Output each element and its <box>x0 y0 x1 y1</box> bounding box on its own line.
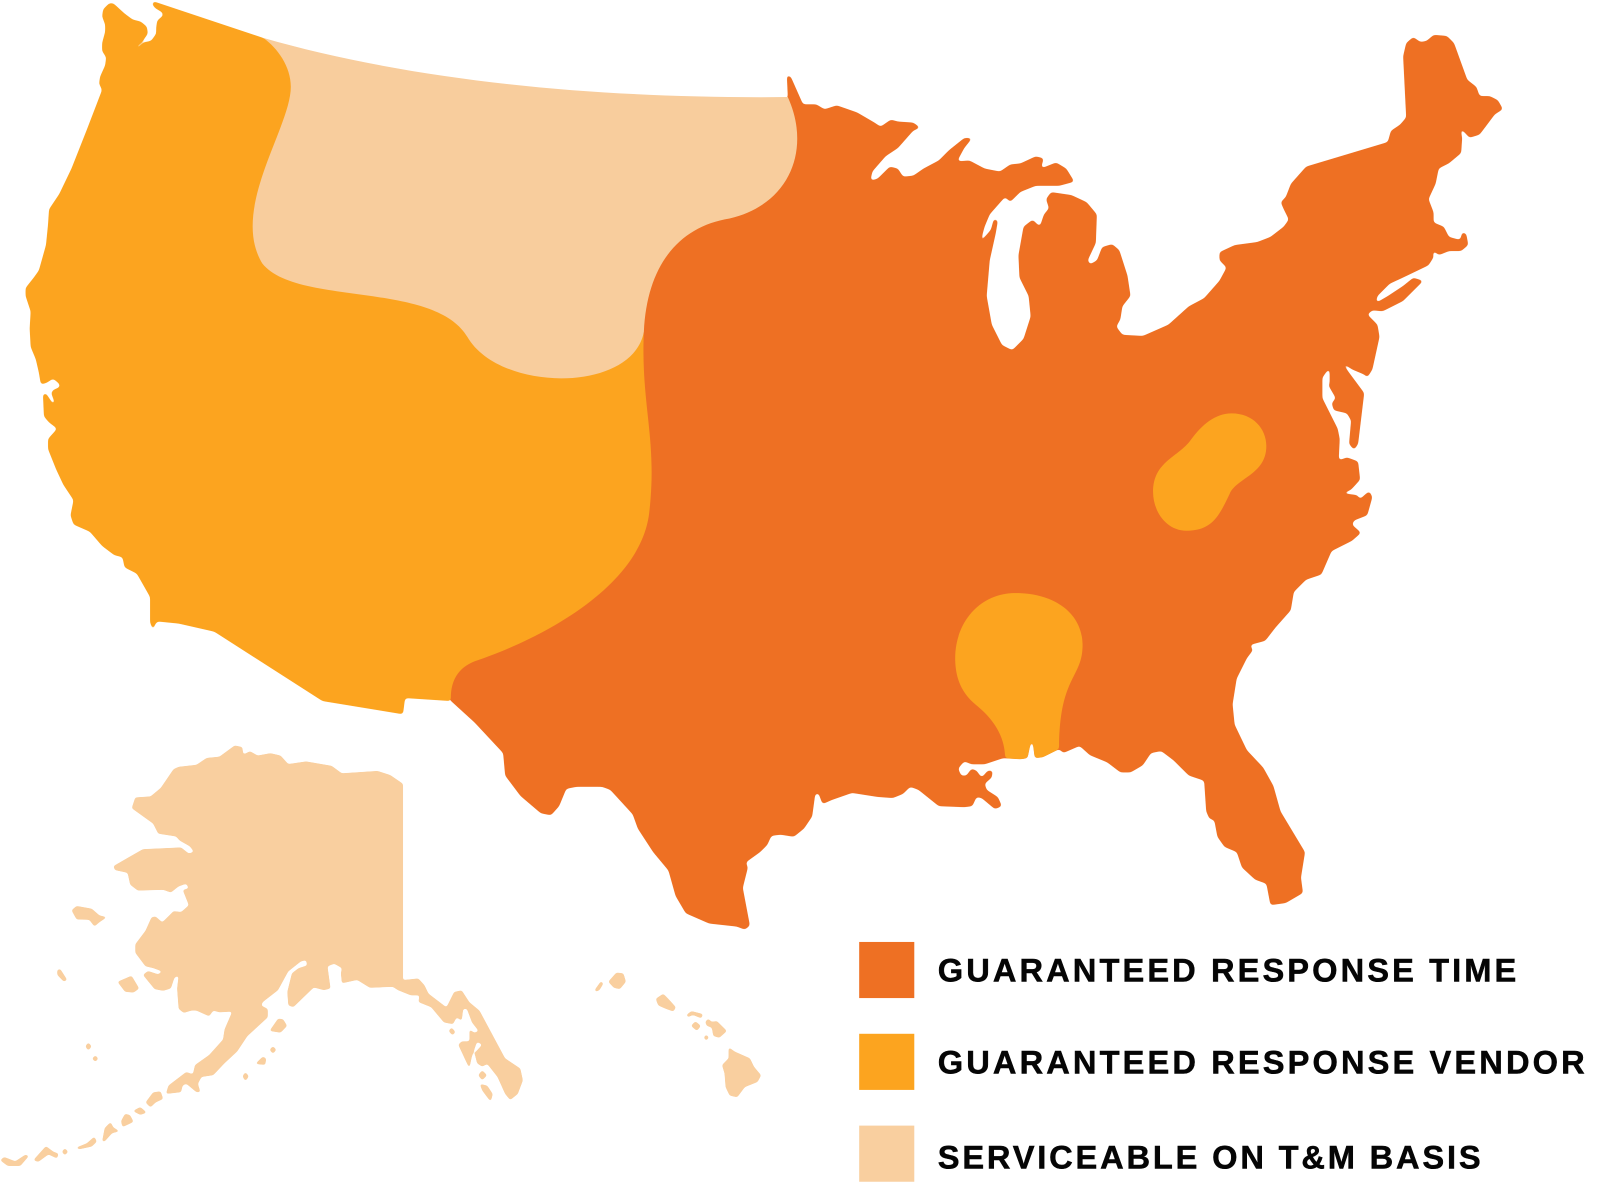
map: contiguous United States <box>26 1 1503 930</box>
region: guaranteed response vendor (western US) <box>26 1 652 714</box>
map: Hawaii <box>594 973 761 1097</box>
legend label: serviceable on T&M basis: SERVICEABLE ON T&M BASIS <box>938 1138 1481 1175</box>
Alaska islands <box>0 906 493 1166</box>
region: guaranteed response time (eastern US) <box>429 35 1503 930</box>
legend swatch: guaranteed response time <box>859 942 914 998</box>
region: vendor area, Mississippi and Alabama <box>955 593 1083 759</box>
legend label: guaranteed response time: GUARANTEED RESPONSE TIME <box>938 952 1516 989</box>
legend label: guaranteed response vendor: GUARANTEED RESPONSE VENDOR <box>938 1044 1585 1081</box>
region: serviceable on T&M basis (northern plains) <box>253 38 797 378</box>
legend swatch: guaranteed response vendor <box>859 1034 914 1090</box>
legend <box>859 942 1585 1182</box>
map: Alaska <box>0 745 523 1166</box>
Alaska mainland <box>113 745 523 1100</box>
region: vendor area, Appalachians <box>1153 413 1266 531</box>
legend swatch: serviceable on T&M basis <box>859 1126 914 1182</box>
